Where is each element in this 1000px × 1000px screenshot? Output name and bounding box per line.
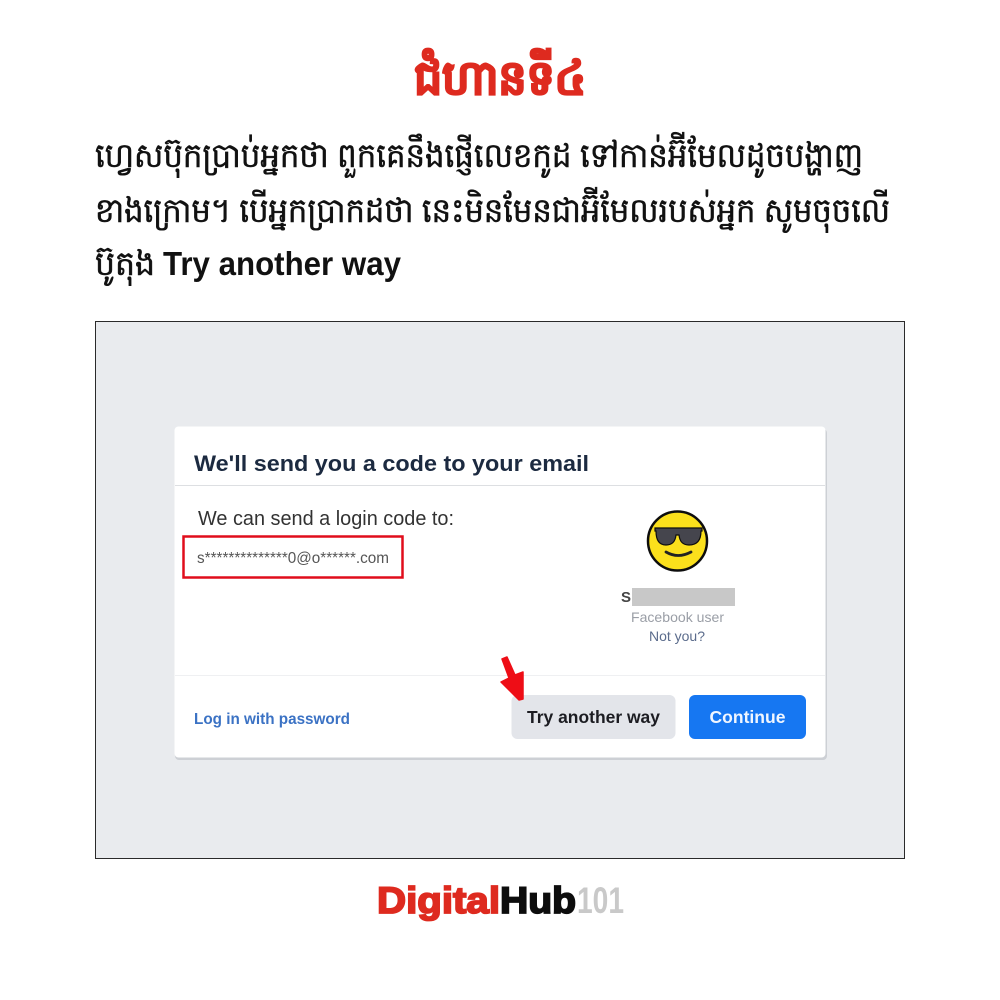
icon: sunglasses smiley avatar [648, 512, 707, 570]
arrow: red pointer [501, 657, 523, 700]
logo [377, 880, 624, 921]
instruction text block: ខាងក្រោម។ បើអ្នកប្រាកដថា នេះមិនមែនជាអ៊ីមែលរបស់អ្នក សូមចុចលើ [95, 187, 890, 233]
facebook user label: Facebook user [631, 609, 724, 625]
try another way button [512, 695, 676, 739]
dialog card [174, 426, 827, 760]
highlighted email: s**************0@o******.com [197, 550, 389, 567]
logo: Hub [500, 880, 576, 921]
try another way button: Try another way [527, 707, 660, 727]
title: ជំហានទី៤ [414, 48, 586, 104]
instruction text block: ហ្វេសប៊ុកប្រាប់អ្នកថា ពួកគេនឹងផ្ញើលេខកូដ ទៅកាន់អ៊ីមែលដូចបង្ហាញ [95, 132, 863, 178]
screenshot panel [96, 322, 904, 858]
log in link: Log in with password [194, 711, 350, 728]
instruction text block: ប៊ូតុង [95, 245, 155, 286]
continue button: Continue [710, 707, 786, 727]
not you link: Not you? [649, 628, 705, 644]
login code label: We can send a login code to: [198, 508, 454, 530]
user name, redacted: S [621, 589, 631, 606]
highlighted email [184, 536, 402, 578]
continue button [689, 695, 806, 739]
instruction text block: Try another way [163, 245, 402, 282]
logo: 101 [577, 880, 624, 921]
dialog heading: We'll send you a code to your email [194, 451, 589, 476]
logo: Digital [377, 880, 500, 921]
instruction text block [95, 132, 890, 286]
user name, redacted [621, 588, 735, 606]
